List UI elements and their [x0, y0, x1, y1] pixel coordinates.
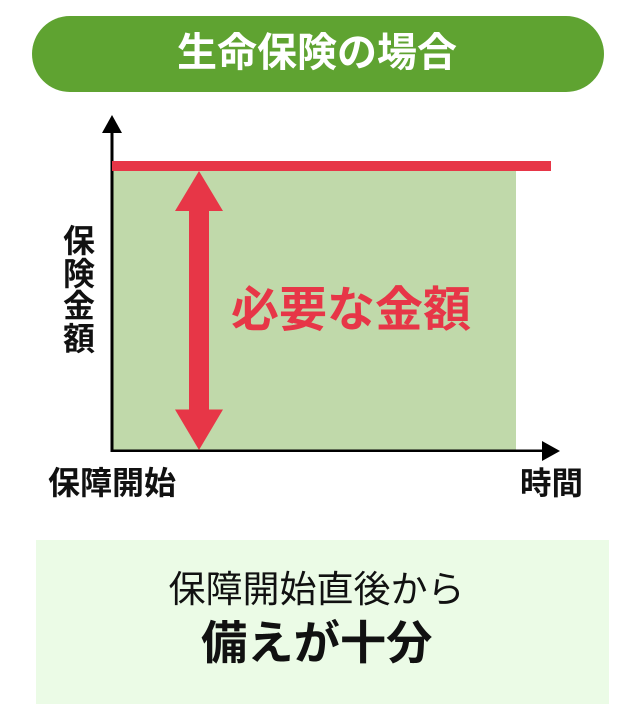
- summary line 1: 保障開始直後から: [168, 569, 464, 610]
- x axis arrow: [110, 441, 560, 461]
- chart: [102, 115, 560, 461]
- x axis label: coverage start: 保障開始: [48, 465, 176, 501]
- summary panel: [36, 540, 609, 704]
- title text: 生命保険の場合: [177, 31, 457, 75]
- y axis label: [63, 223, 95, 356]
- green coverage area: [112, 171, 516, 451]
- y axis label: 額: [63, 320, 95, 356]
- title banner: [32, 16, 604, 92]
- chart label: required amount: 必要な金額: [231, 284, 471, 337]
- red double arrow: [175, 171, 223, 450]
- y axis label: 険: [63, 256, 95, 292]
- y axis label: 金: [63, 288, 95, 324]
- y axis arrow: [102, 115, 122, 452]
- y axis label: 保: [63, 223, 95, 259]
- summary line 2: 備えが十分: [201, 617, 432, 669]
- x axis label: time: 時間: [520, 465, 583, 501]
- red required amount line: [112, 161, 551, 171]
